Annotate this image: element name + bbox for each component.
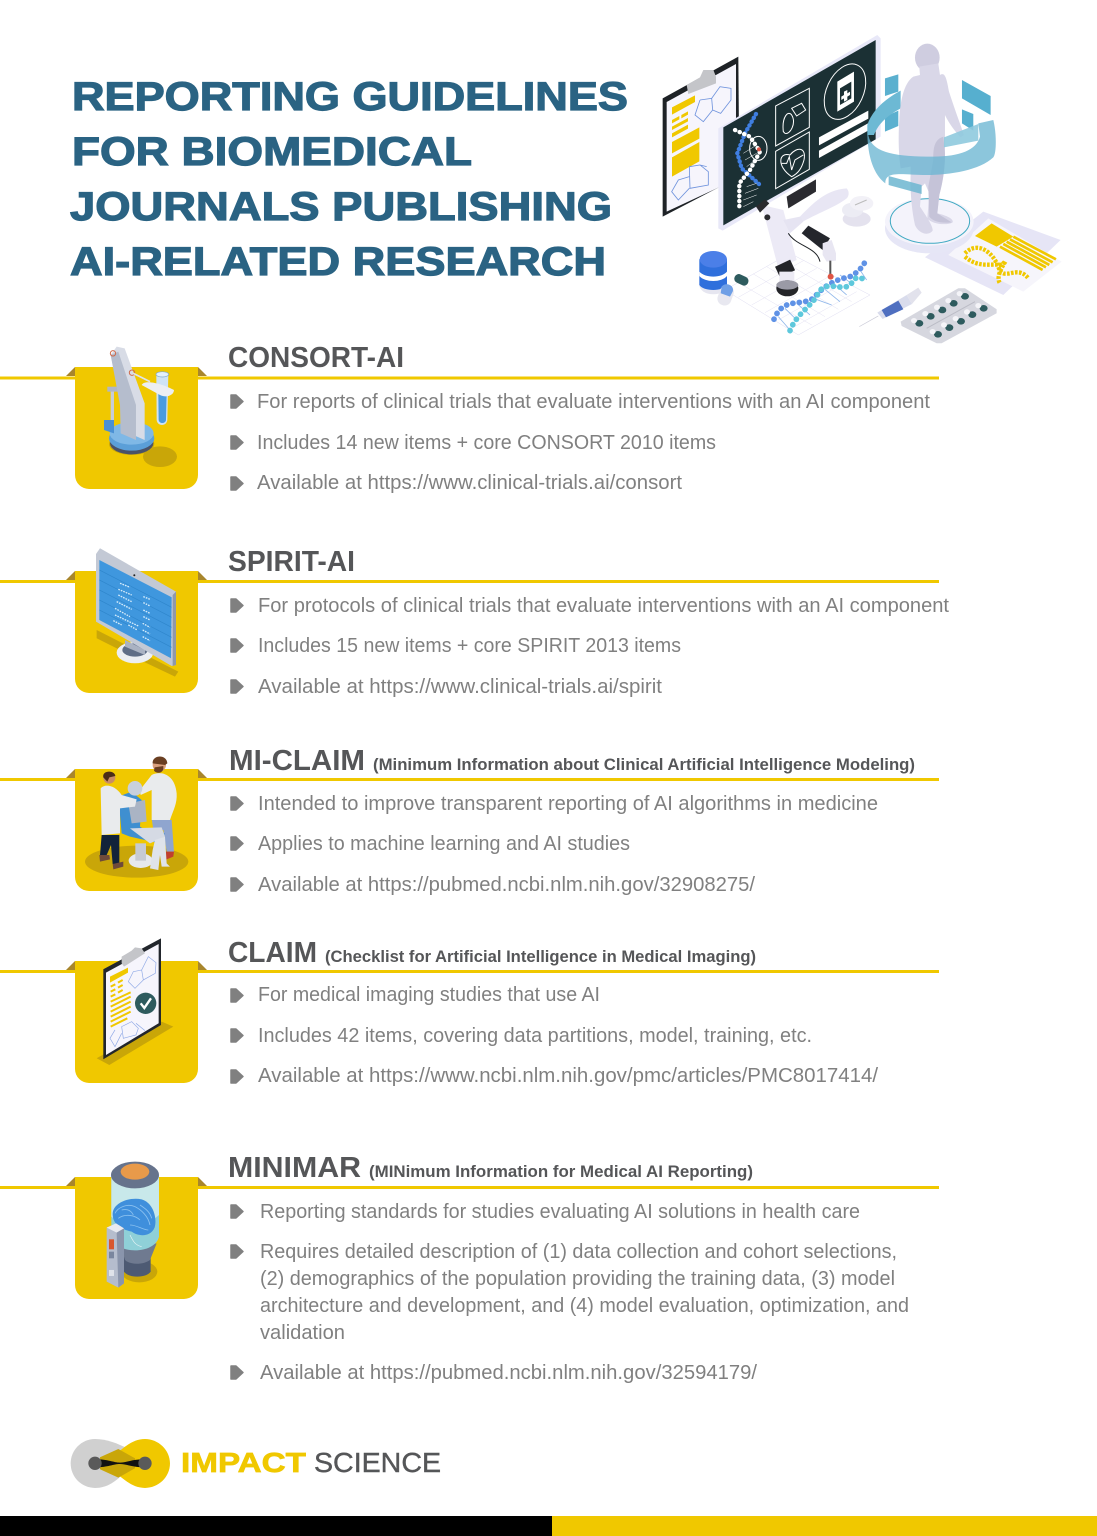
heading: CLAIM: CLAIM [228, 937, 317, 969]
heading: MINIMAR: MINIMAR [228, 1152, 361, 1184]
bullet list: architecture and development, and (4) model evaluation, optimization, and [260, 1295, 909, 1317]
icon: clipboard with check mark [97, 938, 173, 1065]
divider ribbon and yellow card [0, 571, 939, 693]
bullet list: (2) demographics of the population providing the training data, (3) model [260, 1268, 895, 1290]
icon: syringe [859, 288, 922, 327]
divider ribbon and yellow card [0, 961, 939, 1083]
section: SPIRIT-AI [0, 546, 949, 698]
bullet list: Available at https://www.clinical-trials.ai/consort [257, 472, 682, 494]
bullet list [231, 391, 930, 494]
bullet list [231, 793, 878, 896]
logo wordmark: SCIENCE [314, 1447, 441, 1478]
bullet list: For protocols of clinical trials that evaluate interventions with an AI component [258, 595, 949, 617]
divider ribbon and yellow card [0, 1177, 939, 1299]
bullet list: Available at https://pubmed.ncbi.nlm.nih.gov/32594179/ [260, 1362, 757, 1384]
bullet list: Available at https://www.clinical-trials.ai/spirit [258, 676, 662, 698]
section: MINIMAR [0, 1152, 939, 1384]
icon: robot arm [756, 199, 836, 296]
bullet list: Available at https://www.ncbi.nlm.nih.gov/pmc/articles/PMC8017414/ [258, 1065, 878, 1087]
heading: MI-CLAIM: MI-CLAIM [229, 745, 365, 777]
icon: monitor with DNA [718, 35, 881, 231]
title [70, 75, 628, 284]
bullet list: Intended to improve transparent reporting of AI algorithms in medicine [258, 793, 878, 815]
divider ribbon and yellow card [0, 367, 939, 489]
footer bar [0, 1516, 1097, 1536]
bullet list: Includes 14 new items + core CONSORT 2010 items [257, 432, 716, 454]
heading: MINIMAR: (MINimum Information for Medical AI Reporting) [369, 1162, 753, 1181]
icon: computer monitor [96, 548, 178, 677]
icon: clipboard with molecules [663, 57, 739, 217]
bullet list: Includes 15 new items + core SPIRIT 2013 items [258, 635, 681, 657]
heading: MI-CLAIM: (Minimum Information about Clinical Artificial Intelligence Modeling) [373, 755, 915, 774]
bullet list: validation [260, 1322, 345, 1344]
hero illustration: AI in medicine [663, 35, 1062, 343]
bullet list: For medical imaging studies that use AI [258, 984, 600, 1006]
icon: blister pack [901, 288, 997, 343]
heading: CONSORT-AI: CONSORT-AI [228, 342, 404, 374]
icon: papers with yellow DNA [925, 212, 1062, 295]
divider ribbon and yellow card [0, 769, 939, 891]
title: JOURNALS PUBLISHING [70, 185, 612, 229]
logo mark [71, 1439, 170, 1488]
logo: Impact Science [71, 1439, 441, 1488]
title: REPORTING GUIDELINES [72, 75, 628, 119]
bullet list: Applies to machine learning and AI studies [258, 833, 630, 855]
heading: CLAIM: (Checklist for Artificial Intelligence in Medical Imaging) [325, 947, 756, 966]
bullet list: Requires detailed description of (1) data collection and cohort selections, [260, 1241, 897, 1263]
title: AI-RELATED RESEARCH [70, 240, 606, 284]
heading: CLAIM [228, 937, 756, 969]
section: CLAIM [0, 937, 939, 1087]
icon: brain in glass cylinder [107, 1162, 159, 1288]
icon: person on scanner with rings [867, 44, 996, 253]
logo wordmark [181, 1447, 441, 1478]
bullet list [231, 595, 949, 698]
section: CONSORT-AI [0, 342, 939, 494]
bullet list: Includes 42 items, covering data partitions, model, training, etc. [258, 1025, 812, 1047]
logo wordmark: IMPACT [181, 1447, 306, 1478]
icon: doctors with robot [85, 756, 188, 878]
bullet list: Available at https://pubmed.ncbi.nlm.nih.gov/32908275/ [258, 874, 755, 896]
icon: robotic arm with test tube [104, 347, 177, 467]
icon: medicine bottle and capsules [699, 251, 750, 307]
bullet list: Reporting standards for studies evaluating AI solutions in health care [260, 1201, 860, 1223]
bullet list [231, 1201, 909, 1384]
section: MI-CLAIM [0, 745, 939, 896]
heading: MINIMAR [228, 1152, 753, 1184]
bullet list [231, 984, 878, 1087]
heading: MI-CLAIM [229, 745, 915, 777]
icon: stack of pills [842, 196, 873, 227]
icon: DNA model on grid [725, 253, 870, 335]
bullet list: For reports of clinical trials that evaluate interventions with an AI component [257, 391, 930, 413]
title: FOR BIOMEDICAL [72, 130, 472, 174]
heading: SPIRIT-AI: SPIRIT-AI [228, 546, 355, 578]
